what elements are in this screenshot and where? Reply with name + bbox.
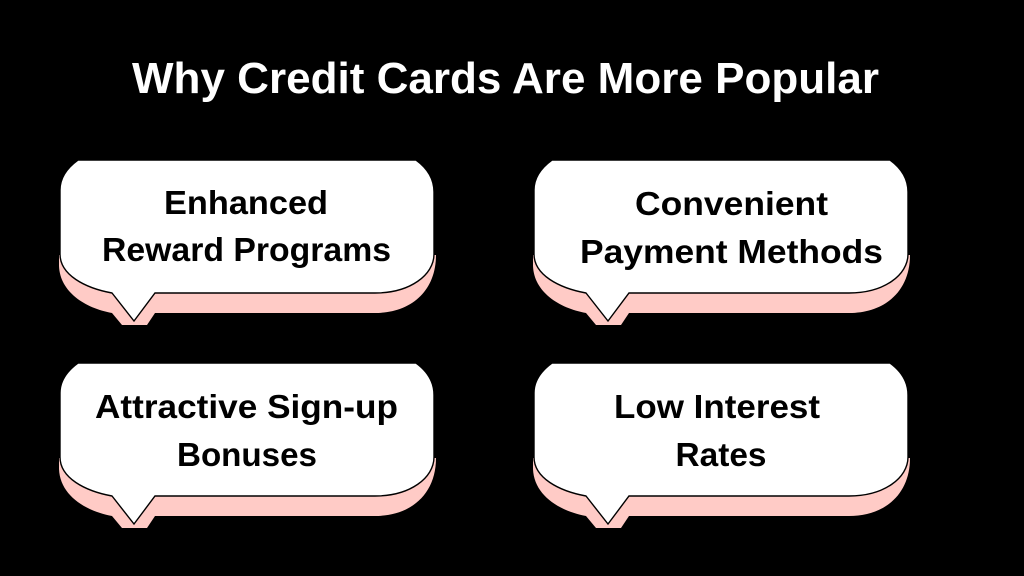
text: enhanced reward programs: Reward Programs bbox=[102, 231, 391, 268]
title: Why Credit Cards Are More Popular bbox=[132, 54, 879, 103]
text: convenient payment methods: Convenient bbox=[635, 185, 828, 222]
text: low interest rates: Low Interest bbox=[614, 388, 820, 425]
text: low interest rates bbox=[614, 388, 820, 473]
text: convenient payment methods bbox=[580, 185, 883, 270]
text: low interest rates: Rates bbox=[676, 436, 766, 473]
panel: attractive sign-up bonuses bbox=[59, 363, 436, 528]
text: convenient payment methods: Payment Methods bbox=[580, 233, 883, 270]
panel: low interest rates bbox=[533, 363, 910, 528]
text: attractive sign-up bonuses: Bonuses bbox=[177, 436, 317, 473]
panel: enhanced reward programs bbox=[59, 160, 436, 325]
text: attractive sign-up bonuses: Attractive Sign-up bbox=[95, 388, 398, 425]
panel: convenient payment methods bbox=[533, 160, 910, 325]
text: attractive sign-up bonuses bbox=[95, 388, 398, 473]
text: enhanced reward programs bbox=[102, 184, 391, 268]
text: enhanced reward programs: Enhanced bbox=[164, 184, 328, 221]
